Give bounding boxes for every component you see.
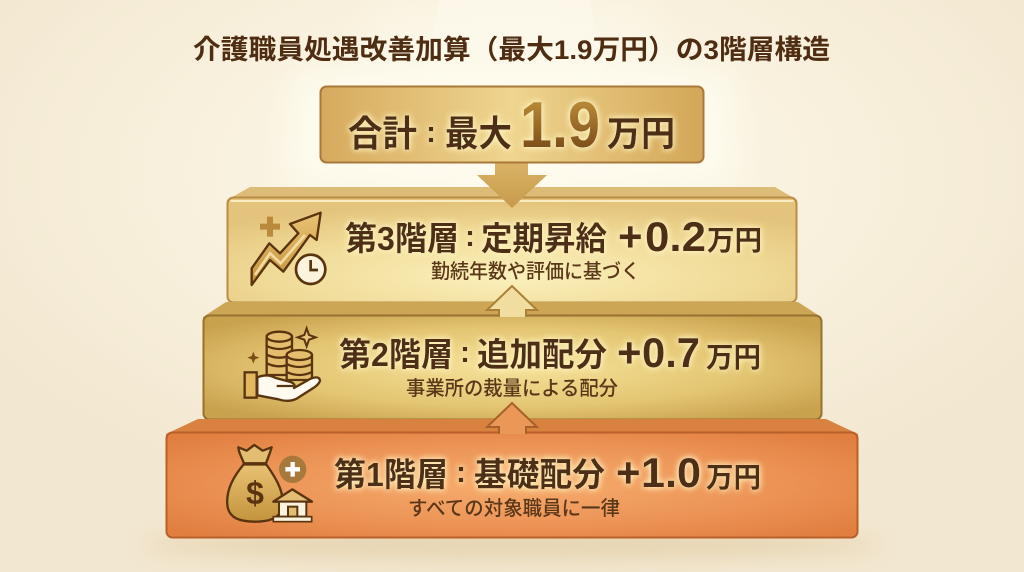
tier 2 heading: : bbox=[460, 336, 470, 369]
tier 3 description: 勤続年数や評価に基づく bbox=[431, 260, 640, 283]
tier 1 heading: 万円 bbox=[706, 462, 761, 493]
tier 3 heading: + bbox=[618, 213, 643, 260]
tier 2 heading: 万円 bbox=[706, 342, 761, 373]
total text: 合計 bbox=[348, 113, 417, 154]
tier 1 heading: 基礎配分 bbox=[474, 456, 605, 493]
tier 3 heading: 0.2 bbox=[645, 213, 706, 260]
icon: money bag, plus and house: $ bbox=[246, 475, 264, 511]
arrow: total down to tier 3 bbox=[477, 160, 547, 208]
total text: 万円 bbox=[607, 115, 675, 154]
tier 1 heading: : bbox=[456, 456, 466, 489]
icon: rising arrow with clock bbox=[252, 213, 325, 285]
tier 3 heading: : bbox=[465, 220, 475, 253]
panel: tier 1 bbox=[166, 403, 858, 538]
tier 1 heading: 1.0 bbox=[641, 449, 701, 496]
arrow: tier 1 up to tier 2 bbox=[487, 403, 537, 434]
total box bbox=[320, 86, 704, 162]
total text bbox=[348, 88, 675, 161]
tier 2 heading: + bbox=[617, 329, 642, 376]
arrow: tier 2 up to tier 3 bbox=[487, 286, 537, 317]
tier 1 heading: + bbox=[616, 449, 641, 496]
panel: tier 3 bbox=[227, 187, 797, 302]
icon: money bag, plus and house bbox=[227, 445, 312, 522]
tier 3 heading: 第3階層 bbox=[345, 220, 459, 257]
tier 1 heading: 第1階層 bbox=[334, 456, 448, 493]
total text: 1.9 bbox=[520, 88, 600, 161]
tier 1 description: すべての対象職員に一律 bbox=[408, 497, 620, 520]
tier 2 description: 事業所の裁量による配分 bbox=[406, 377, 618, 400]
total text: 最大 bbox=[445, 113, 512, 154]
tier 2 block body bbox=[203, 302, 822, 420]
tier 1 heading bbox=[334, 449, 761, 496]
tier 3 block body bbox=[227, 187, 797, 302]
tier 2 heading: 追加配分 bbox=[477, 336, 607, 373]
tier 1 block body bbox=[166, 419, 858, 538]
title: 介護職員処遇改善加算（最大1.9万円）の3階層構造 bbox=[193, 35, 830, 65]
tier 2 heading bbox=[339, 329, 761, 376]
tier 2 heading: 第2階層 bbox=[339, 336, 453, 373]
tier 3 heading bbox=[345, 213, 762, 260]
tier 3 heading: 万円 bbox=[707, 225, 762, 256]
panel: total bbox=[320, 86, 704, 162]
icon: coins on open hand bbox=[245, 328, 320, 401]
tier 2 heading: 0.7 bbox=[642, 329, 700, 376]
panel: tier 2 bbox=[203, 286, 822, 420]
tier 3 heading: 定期昇給 bbox=[481, 220, 607, 257]
total text: : bbox=[426, 116, 436, 149]
